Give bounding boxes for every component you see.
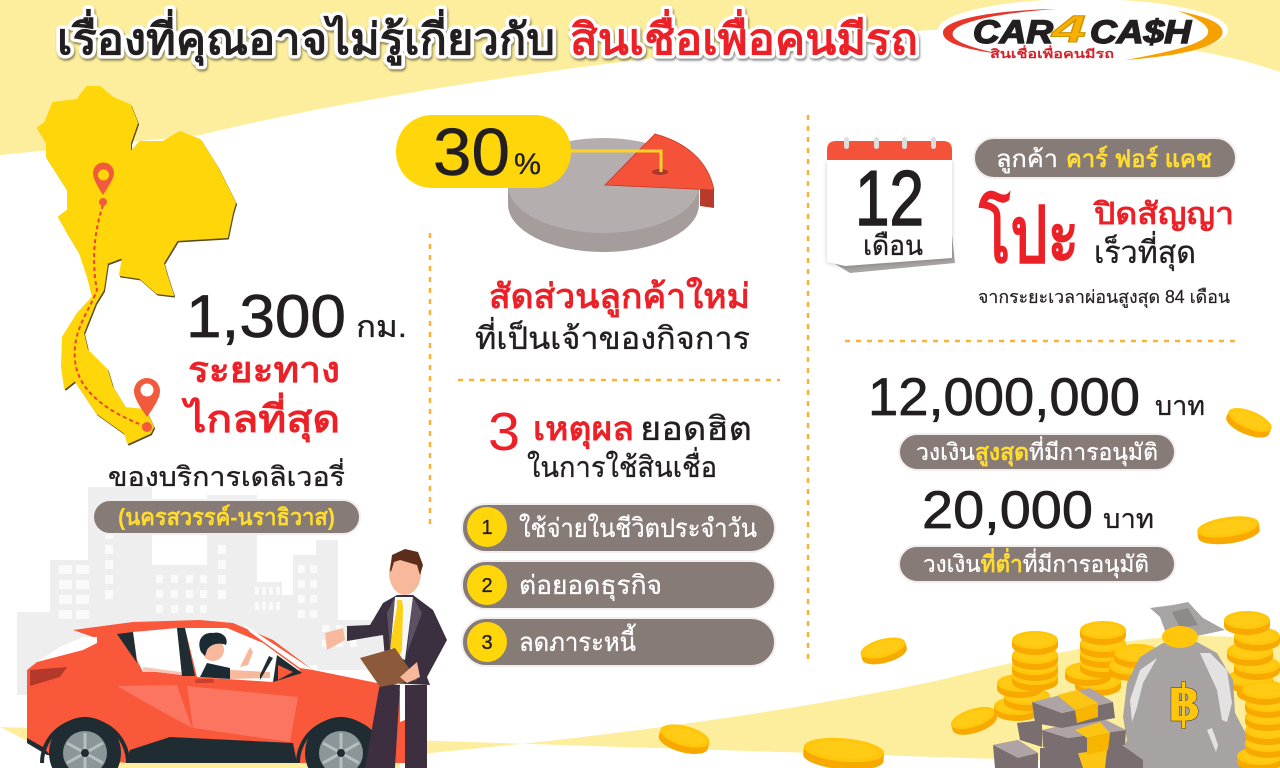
background: top yellow band — [0, 0, 1280, 155]
logo: Car4Cash: สินเชื่อเพื่อคนมีรถ — [990, 45, 1114, 61]
calendar: เดือน — [863, 230, 923, 261]
30% label — [396, 115, 571, 190]
loose coins — [656, 403, 1275, 768]
fastest payoff text: ปิดสัญญา — [1092, 198, 1234, 232]
pin: destination — [134, 378, 160, 432]
reasons heading: ยอดฮิต — [640, 410, 752, 447]
distance text: ไกลที่สุด — [181, 392, 340, 443]
reasons heading: เหตุผล — [533, 410, 634, 450]
reason 2 — [462, 561, 775, 609]
reason 1 — [462, 504, 775, 552]
pin: start — [93, 162, 114, 206]
driver — [199, 633, 273, 680]
30% wedge — [700, 188, 714, 208]
reason 3: 3 — [481, 632, 493, 654]
min amount: 20,000 — [922, 481, 1093, 540]
fastest payoff text: โปะ — [978, 189, 1079, 279]
reasons heading: ในการใช้สินเชื่อ — [527, 447, 717, 484]
distance text — [108, 283, 407, 492]
money bag: ฿ — [1168, 675, 1201, 733]
max amount: บาท — [1155, 391, 1205, 421]
reasons heading: 3 — [488, 402, 520, 462]
door panels — [117, 685, 192, 728]
new customer share text — [475, 276, 750, 356]
title — [57, 9, 918, 67]
dashed dividers — [429, 233, 431, 525]
min amount: บาท — [1103, 504, 1154, 534]
max amount: วงเงินสูงสุดที่มีการอนุมัติ — [916, 436, 1158, 467]
reason 3: ลดภาระหนี้ — [519, 623, 636, 657]
new customer share text: ที่เป็นเจ้าของกิจการ — [475, 317, 750, 356]
distance text: ของบริการเดลิเวอรี่ — [108, 458, 345, 492]
reason 3 — [462, 618, 775, 666]
reasons heading — [488, 402, 752, 484]
route line — [75, 205, 147, 427]
route pill — [93, 500, 360, 534]
title: สินเชื่อเพื่อคนมีรถ — [570, 9, 918, 64]
windows — [133, 628, 182, 675]
city skyline — [17, 487, 387, 700]
reason 2: ต่อยอดธุรกิจ — [519, 570, 662, 601]
min amount — [899, 481, 1175, 582]
distance text: 1,300 — [186, 283, 346, 350]
fastest payoff text: จากระยะเวลาผ่อนสูงสุด 84 เดือน — [978, 287, 1230, 308]
salesman — [325, 549, 447, 768]
min amount: วงเงินที่ต่ำที่มีการอนุมัติ — [923, 547, 1149, 578]
calendar — [827, 137, 955, 273]
pie chart — [508, 134, 714, 252]
distance text: กม. — [356, 311, 407, 344]
customer pill — [974, 138, 1236, 178]
underbody — [127, 737, 297, 763]
coin stacks — [994, 611, 1280, 721]
money bag — [1113, 602, 1253, 768]
30% label: % — [514, 148, 541, 181]
customer pill: ลูกค้า — [996, 146, 1058, 174]
logo: Car4Cash: 4 — [1050, 9, 1086, 51]
logo: Car4Cash — [938, 0, 1228, 61]
coin stack: right front — [1237, 681, 1280, 768]
background: bottom yellow band — [0, 636, 1280, 768]
calendar: 12 — [855, 154, 924, 242]
fastest payoff text — [978, 189, 1234, 308]
new customer share text: สัดส่วนลูกค้าใหม่ — [489, 276, 750, 318]
30% label: 30 — [433, 115, 510, 190]
max amount: 12,000,000 — [868, 368, 1140, 427]
logo: Car4Cash: CAR — [973, 14, 1053, 50]
map of Thailand — [38, 87, 236, 444]
customer pill: คาร์ ฟอร์ แคช — [1066, 145, 1212, 173]
reason 1: ใช้จ่ายในชีวิตประจำวัน — [519, 513, 757, 543]
route pill: (นครสวรรค์-นราธิวาส) — [118, 504, 335, 530]
title: เรื่องที่คุณอาจไม่รู้เกี่ยวกับ — [57, 9, 555, 67]
reason 2: 2 — [481, 575, 493, 597]
max amount — [868, 368, 1205, 470]
front wheel — [298, 717, 384, 768]
car with driver — [27, 620, 407, 768]
reason 1: 1 — [481, 517, 493, 539]
banknote stacks — [993, 688, 1143, 768]
logo: Car4Cash: CA$H — [1090, 14, 1192, 50]
distance text: ระยะทาง — [188, 349, 340, 390]
rear wheel — [42, 717, 128, 768]
fastest payoff text: เร็วที่สุด — [1094, 231, 1196, 272]
